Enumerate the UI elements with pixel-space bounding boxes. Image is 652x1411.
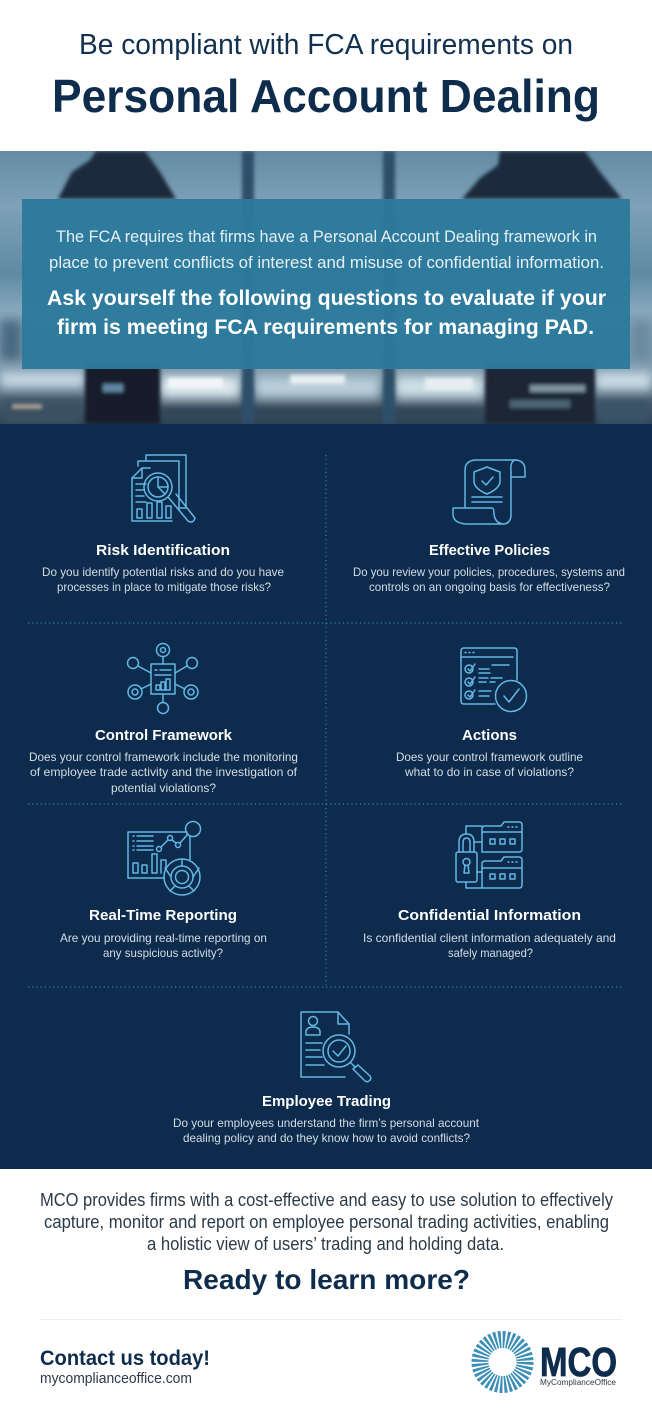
effective policies text: Effective Policies (429, 543, 550, 559)
logo sunburst (480, 1340, 525, 1384)
icon: employee trading (301, 1012, 371, 1082)
real-time reporting text: Are you providing real-time reporting on (60, 931, 267, 945)
logo: MCO: MCO (540, 1339, 617, 1385)
confidential information text: Confidential Information (398, 908, 581, 924)
icon: confidential information (456, 822, 522, 888)
employee trading text: dealing policy and do they know how to avoid conflicts? (183, 1131, 470, 1145)
icon: control framework (128, 644, 198, 714)
risk identification text: processes in place to mitigate those risks? (57, 580, 271, 594)
confidential information text (363, 908, 616, 960)
icon: risk identification (132, 455, 195, 522)
actions text: Actions (462, 728, 517, 744)
footer divider (40, 1319, 622, 1320)
confidential information text: safely managed? (448, 946, 533, 960)
contact details: mycomplianceoffice.com (40, 1371, 192, 1387)
effective policies text (353, 543, 625, 594)
closing paragraph: MCO provides firms with a cost-effective and easy to use solution to effectively (40, 1190, 613, 1210)
logo: MCO (480, 1339, 617, 1387)
effective policies text: controls on an ongoing basis for effectiveness? (369, 580, 610, 594)
risk identification text (42, 543, 284, 594)
call to action heading: Ready to learn more? (183, 1264, 470, 1295)
closing paragraph: capture, monitor and report on employee personal trading activities, enabling (44, 1212, 609, 1232)
confidential information text: Is confidential client information adequately and (363, 931, 616, 945)
real-time reporting text: Real-Time Reporting (89, 908, 237, 924)
closing paragraph (40, 1190, 613, 1254)
closing paragraph: a holistic view of users’ trading and holding data. (147, 1234, 504, 1254)
risk identification text: Risk Identification (96, 543, 230, 559)
title (52, 29, 600, 122)
intro panel: Ask yourself the following questions to evaluate if your (47, 287, 606, 310)
control framework text: Control Framework (95, 728, 233, 744)
actions text: Does your control framework outline (396, 750, 583, 764)
actions text (396, 728, 583, 779)
effective policies text: Do you review your policies, procedures, systems and (353, 565, 625, 579)
control framework text: of employee trade activity and the investigation of (30, 765, 298, 779)
actions text: what to do in case of violations? (404, 765, 574, 779)
logo: MCO: MyComplianceOffice (540, 1378, 617, 1387)
intro panel: firm is meeting FCA requirements for managing PAD. (57, 316, 594, 339)
icon: actions (461, 648, 526, 712)
real-time reporting text: any suspicious activity? (103, 946, 223, 960)
hero photo: two businessmen at a window (0, 151, 652, 426)
employee trading text: Do your employees understand the firm’s personal account (173, 1116, 480, 1130)
intro panel: place to prevent conflicts of interest and misuse of confidential information. (49, 253, 604, 272)
contact details (40, 1347, 210, 1387)
contact details: Contact us today! (40, 1347, 210, 1370)
employee trading text (173, 1094, 480, 1145)
real-time reporting text (60, 908, 267, 960)
control framework text (29, 728, 298, 795)
icon: real-time reporting (128, 822, 200, 895)
control framework text: potential violations? (111, 781, 216, 795)
title: Be compliant with FCA requirements on (79, 29, 573, 61)
icon: effective policies (453, 460, 525, 524)
title: Personal Account Dealing (52, 70, 600, 122)
intro panel (22, 199, 630, 369)
control framework text: Does your control framework include the monitoring (29, 750, 298, 764)
risk identification text: Do you identify potential risks and do you have (42, 565, 284, 579)
questions panel (0, 424, 652, 1169)
intro text: The FCA requires that firms have a Personal Account Dealing framework in (56, 227, 597, 246)
employee trading text: Employee Trading (262, 1094, 391, 1110)
